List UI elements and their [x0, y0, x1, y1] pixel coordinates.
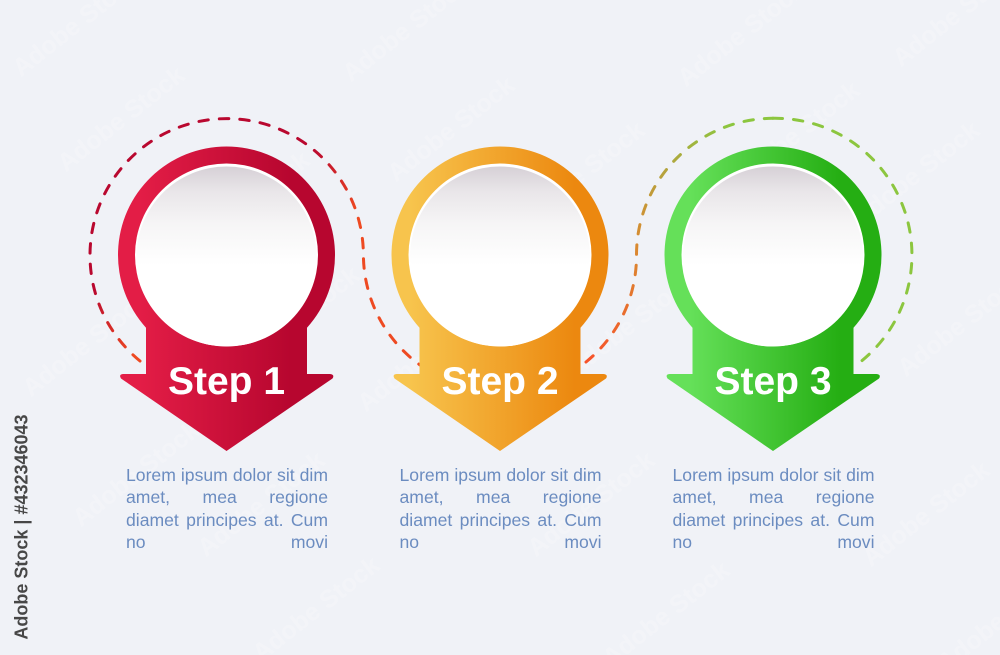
step 3 marker: [665, 146, 882, 451]
watermark pattern: Adobe Stock: [192, 446, 330, 562]
stock credit: Adobe Stock | #432346043: [12, 414, 32, 640]
step 3 description: diamet principes at. Cum: [672, 510, 874, 530]
watermark pattern: Adobe Stock: [382, 71, 520, 187]
step 2 label: Step 2: [441, 360, 559, 403]
step 1 marker: [118, 146, 335, 451]
watermark pattern: Adobe Stock: [227, 261, 365, 377]
step 2 description: diamet principes at. Cum: [400, 510, 602, 530]
step 3 description: amet, mea regione: [672, 487, 874, 507]
watermark pattern: Adobe Stock: [562, 266, 700, 382]
watermark pattern: Adobe Stock: [352, 301, 490, 417]
step 3 arrow body: [665, 146, 882, 451]
watermark pattern: Adobe Stock: [692, 286, 830, 402]
dashed connector: step 1 to step 2: [90, 119, 420, 365]
step 2 arrow body: [392, 146, 609, 451]
watermark pattern: Adobe Stock: [847, 116, 985, 232]
step 1 description: [126, 465, 328, 552]
watermark pattern: Adobe Stock: [857, 456, 995, 572]
step 3 description: Lorem ipsum dolor sit dim: [672, 465, 874, 485]
step 1 label: Step 1: [168, 360, 285, 403]
step 1 arrow body: [118, 146, 335, 451]
step 2 description: amet, mea regione: [400, 487, 602, 507]
step 2 inner circle: [408, 164, 592, 346]
watermark pattern: Adobe Stock: [17, 286, 155, 402]
watermark pattern: Adobe Stock: [512, 116, 650, 232]
watermark pattern: Adobe Stock: [727, 76, 865, 192]
step 1 description: no movi: [126, 532, 328, 552]
step 3 inner circle: [682, 164, 864, 346]
step 3 description: [672, 465, 874, 552]
step 1 description: Lorem ipsum dolor sit dim: [126, 465, 328, 485]
step 2 description: Lorem ipsum dolor sit dim: [400, 465, 602, 485]
step 3 description: no movi: [672, 532, 874, 552]
step 1 description: amet, mea regione: [126, 487, 328, 507]
dashed connector: step 2 to step 3: [586, 118, 912, 366]
watermark pattern: Adobe Stock: [522, 446, 660, 562]
step 2 description: [400, 465, 602, 552]
step 2 marker: [392, 146, 609, 451]
watermark pattern: Adobe Stock: [52, 61, 190, 177]
step 1 description: diamet principes at. Cum: [126, 510, 328, 530]
watermark pattern: Adobe Stock: [177, 146, 315, 262]
step 3 label: Step 3: [714, 360, 832, 403]
step 2 description: no movi: [400, 532, 602, 552]
step 1 inner circle: [135, 164, 318, 346]
watermark pattern: Adobe Stock: [67, 416, 205, 532]
